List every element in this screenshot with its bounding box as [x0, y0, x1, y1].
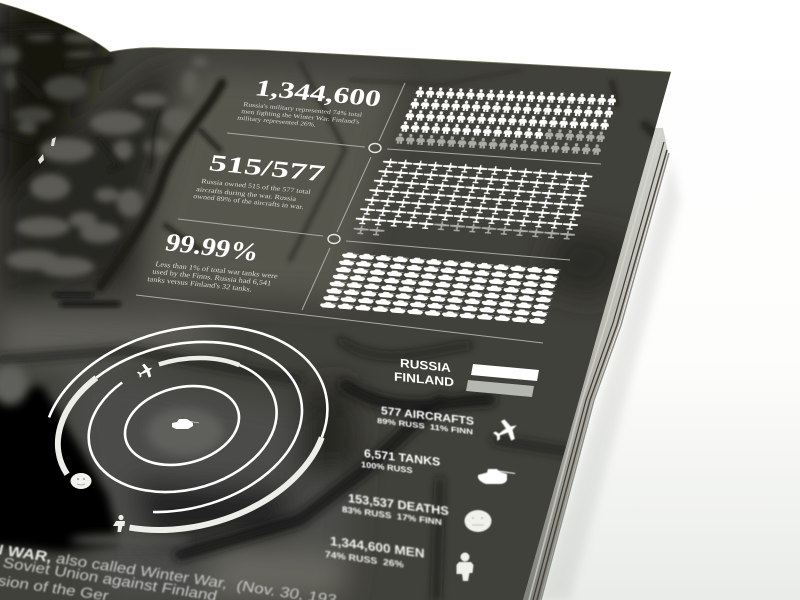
- fact: aircrafts: 89% RUSS 11% FINN: [377, 416, 473, 436]
- icon: aircraft: [490, 416, 522, 447]
- stat text 1: men fighting the Winter War. Finland's: [241, 109, 360, 125]
- stat text 3: Less than 1% of total war tanks were: [155, 260, 279, 280]
- photo: black corner at lower left: [0, 385, 120, 552]
- top page edge: [0, 3, 671, 72]
- radial ring chart: [49, 326, 327, 530]
- icon: sad face: [464, 510, 492, 532]
- stat text 2: [193, 177, 311, 211]
- ring icon: aircraft: [135, 361, 156, 381]
- photo: broad tone zones: [0, 0, 640, 600]
- book shadow: [540, 160, 680, 600]
- ring: aircraft: [89, 358, 277, 492]
- stat text 3: used by the Finns. Russia had 6,541: [152, 267, 272, 287]
- stat text 1: [237, 102, 363, 128]
- fact: men: [325, 534, 425, 570]
- ring: tanks: [117, 375, 247, 476]
- stat heading 3: 99.99%: [163, 228, 262, 266]
- icon: tank: [478, 469, 515, 484]
- fact: tanks: 6,571 TANKS: [364, 446, 440, 469]
- stat text 1: military represented 26%.: [237, 115, 317, 128]
- dividers and timeline connectors: [136, 83, 601, 343]
- stat text 2: Russia owned 515 of the 577 total: [201, 177, 311, 196]
- ring: men: [49, 326, 327, 530]
- pictogram: soldiers: [394, 87, 618, 155]
- stat text 2: aircrafts during the war. Russia: [196, 185, 298, 203]
- pictogram: tanks: [319, 251, 561, 325]
- legend swatches: [466, 364, 539, 397]
- fact: aircrafts: 577 AIRCRAFTS: [381, 405, 474, 428]
- stat: 515/577 aircraft: [193, 150, 327, 211]
- photo: lower shadows: [0, 340, 570, 600]
- pictogram: aircraft: [352, 158, 594, 241]
- legend labels: FINLAND: [394, 369, 454, 389]
- ring: deaths: [58, 342, 302, 512]
- legend labels: [394, 356, 454, 389]
- photo: branch shadows: [0, 28, 655, 304]
- ring icon: tank: [172, 419, 199, 429]
- stat text 3: tanks versus Finland's 32 tanks.: [147, 275, 253, 293]
- ring icon: person: [113, 515, 125, 532]
- photo: bokeh blotches, left page and crease: [0, 33, 208, 277]
- legend labels: RUSSIA: [400, 356, 451, 375]
- stat heading 2: 515/577: [207, 150, 327, 187]
- icon: man: [456, 552, 474, 581]
- fact: men: 74% RUSS 26%: [325, 550, 404, 570]
- stat text 1: Russia's military represented 74% total: [243, 102, 363, 118]
- stat text 2: owned 89% of the aircrafts in war.: [193, 192, 305, 211]
- photo: lower highlights: [0, 365, 223, 546]
- stat heading 1: 1,344,600: [253, 75, 383, 112]
- legend: [394, 356, 539, 397]
- stat: 99.99% tanks: [147, 228, 279, 293]
- fact: deaths: 83% RUSS 17% FINN: [342, 505, 442, 527]
- stat: 1,344,600 men: [237, 75, 383, 128]
- ring icon: smiley: [70, 473, 92, 489]
- fact: deaths: 153,537 DEATHS: [348, 491, 449, 518]
- stat text 3: [147, 260, 279, 293]
- silver specks on crease: [38, 137, 56, 164]
- fact: men: 1,344,600 MEN: [330, 534, 425, 561]
- page stack edge: [523, 128, 669, 600]
- fact: tanks: 100% RUSS: [361, 460, 413, 475]
